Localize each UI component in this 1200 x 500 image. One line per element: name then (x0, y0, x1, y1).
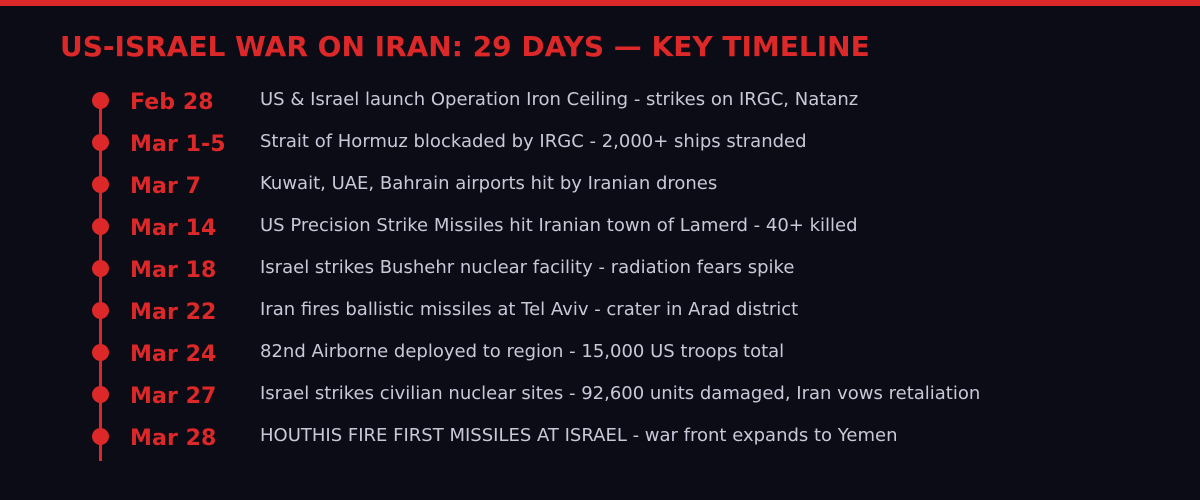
event: Mar 28: HOUTHIS FIRE FIRST MISSILES AT ISRAEL - war front expands to Yemen (260, 425, 898, 446)
event: Mar 14: US Precision Strike Missiles hit Iranian town of Lamerd - 40+ killed (260, 215, 858, 236)
event: Mar 18 (92, 257, 794, 283)
event: Mar 22: Mar 22 (130, 300, 216, 325)
event: Mar 14 (92, 215, 858, 241)
event: Mar 1-5: Strait of Hormuz blockaded by IRGC - 2,000+ ships stranded (260, 131, 807, 152)
event: Mar 27 (92, 383, 980, 409)
event: Mar 24: 82nd Airborne deployed to region - 15,000 US troops total (260, 341, 784, 362)
event: Mar 18: Israel strikes Bushehr nuclear facility - radiation fears spike (260, 257, 794, 278)
event: Mar 1-5: Mar 1-5 (130, 132, 226, 157)
event: Mar 7: Kuwait, UAE, Bahrain airports hit by Iranian drones (260, 173, 717, 194)
event: Mar 7: Mar 7 (130, 174, 201, 199)
event: Mar 22: Iran fires ballistic missiles at Tel Aviv - crater in Arad district (260, 299, 798, 320)
event: Mar 28 (92, 425, 898, 451)
event: Mar 27: Israel strikes civilian nuclear sites - 92,600 units damaged, Iran vows retaliation (260, 383, 980, 404)
event: Mar 7 (92, 173, 717, 199)
event: Mar 24: Mar 24 (130, 342, 216, 367)
event: Mar 1-5 (92, 131, 807, 157)
event: Feb 28 (92, 89, 858, 115)
event: Feb 28: US & Israel launch Operation Iron Ceiling - strikes on IRGC, Natanz (260, 89, 858, 110)
event: Mar 22 (92, 299, 798, 325)
timeline axis (99, 100, 102, 461)
event: Mar 18: Mar 18 (130, 258, 216, 283)
event: Mar 14: Mar 14 (130, 216, 216, 241)
event: Feb 28: Feb 28 (130, 90, 214, 115)
event: Mar 24 (92, 341, 784, 367)
event: Mar 27: Mar 27 (130, 384, 216, 409)
title: US-ISRAEL WAR ON IRAN: 29 DAYS — KEY TIMELINE (60, 30, 870, 63)
event: Mar 28: Mar 28 (130, 426, 216, 451)
top accent bar (0, 0, 1200, 6)
